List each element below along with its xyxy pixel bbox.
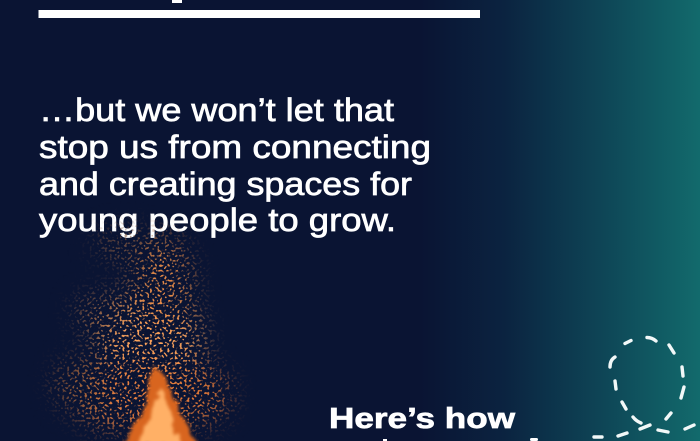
heading: here's how: Here’s how xyxy=(329,403,516,435)
cropped next text line xyxy=(383,438,538,441)
body text: young people to grow. xyxy=(39,202,396,238)
icon: dashed loop path xyxy=(594,338,694,437)
body text: stop us from connecting xyxy=(39,129,431,165)
body text: …but we won’t let that xyxy=(39,92,394,128)
body text xyxy=(39,92,431,238)
campfire flame xyxy=(122,366,198,441)
top bar heading remnant xyxy=(38,0,480,18)
body text: and creating spaces for xyxy=(39,166,412,202)
campfire sparks xyxy=(56,231,229,431)
